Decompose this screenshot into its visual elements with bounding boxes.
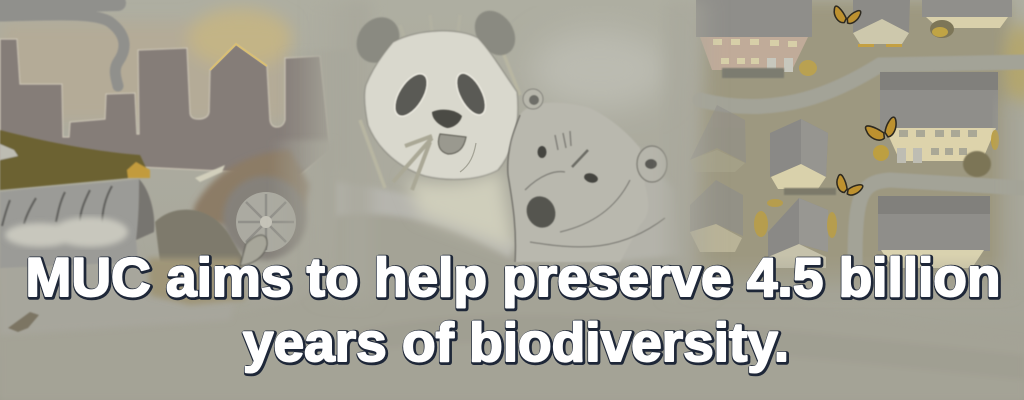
right fade lower (1000, 100, 1024, 300)
house 9 (878, 196, 990, 268)
village ground (690, 0, 1010, 290)
house 4 (873, 72, 999, 177)
turtle in pollution (148, 210, 267, 305)
butterfly middle (865, 116, 900, 144)
panda head (365, 31, 518, 179)
bear ear right (637, 146, 667, 182)
headline line 2: years of biodiversity. (243, 311, 789, 373)
brown car (190, 140, 335, 265)
panel: panda and polar bear (348, 3, 680, 262)
bamboo stalks (360, 15, 520, 188)
smoke plume (0, 3, 124, 86)
bear nose (522, 192, 560, 232)
drain pipe (0, 179, 235, 335)
panda eyes (388, 68, 492, 122)
house 8 faded (690, 180, 743, 252)
roads (700, 62, 1024, 265)
bamboo in mouth (393, 136, 432, 190)
light sky patch (530, 30, 670, 110)
left fade (668, 0, 718, 295)
mustard glow (1004, 23, 1024, 107)
house 1 (696, 0, 817, 78)
house 6 (754, 198, 837, 268)
green car (0, 130, 150, 190)
panda (348, 3, 524, 250)
panel: polluted city (0, 0, 370, 335)
house 7 faded (690, 105, 746, 172)
panel: village with butterflies (660, 0, 1024, 300)
sky glow (0, 8, 292, 122)
butterfly top (832, 6, 861, 25)
panda mouth (438, 134, 466, 154)
panda ears (348, 3, 524, 71)
panda nose (432, 110, 462, 128)
headline line 1: MUC aims to help preserve 4.5 billion (26, 246, 1000, 308)
small bird (8, 312, 39, 332)
bottom fade (660, 255, 1024, 300)
headline (26, 246, 1002, 374)
panel: wash strokes lower (0, 182, 1024, 400)
polar bear (508, 89, 680, 262)
bear ear left (523, 89, 543, 109)
butterfly lower (833, 174, 864, 199)
house 3 (922, 0, 1012, 38)
bear eyes (538, 146, 599, 184)
house 5 (770, 119, 836, 195)
skyline (0, 39, 350, 175)
headline line 1: MUC aims to help preserve 4.5 billion (26, 247, 1002, 309)
headline line 2: years of biodiversity. (244, 312, 790, 374)
bear muzzle lines (525, 172, 665, 247)
right fade (310, 0, 370, 300)
panda body (405, 170, 515, 250)
house 2 (853, 0, 910, 47)
